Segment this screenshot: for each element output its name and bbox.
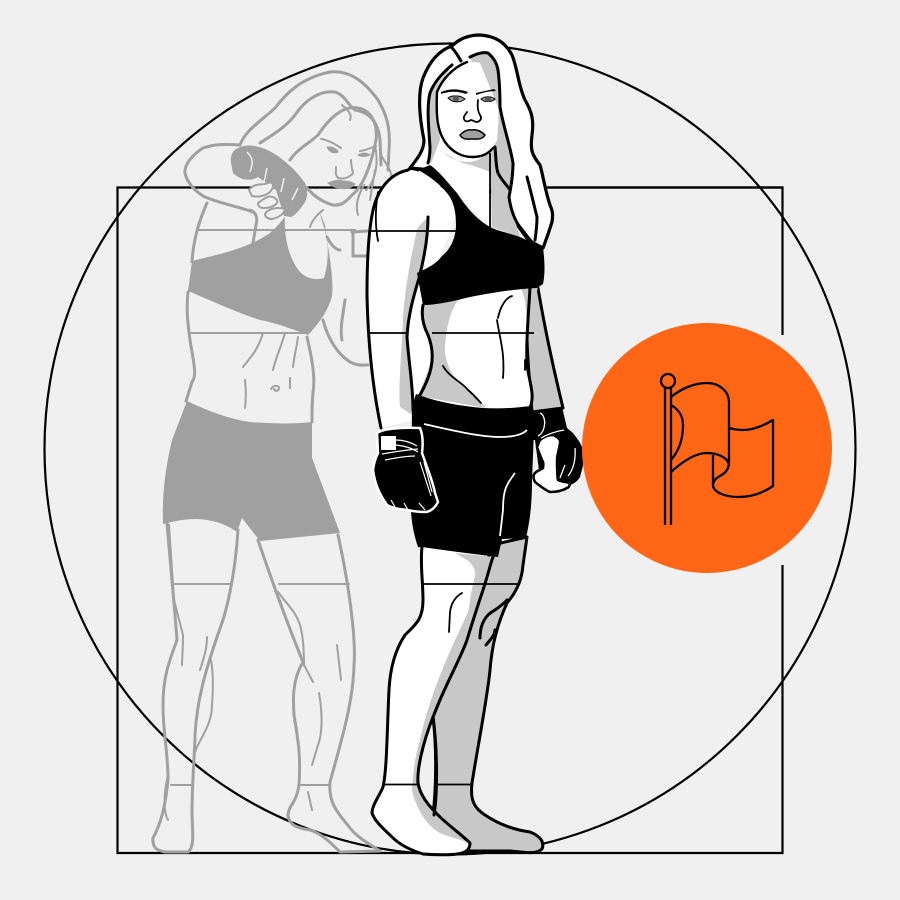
proportion square bbox=[118, 188, 782, 853]
fighter: far glove bbox=[532, 407, 584, 492]
fighter: neck and chest bbox=[430, 140, 490, 228]
icon: flag bbox=[661, 374, 773, 525]
fighter: facial features bbox=[441, 89, 496, 139]
fighter: front leg bbox=[372, 547, 517, 855]
ghost shorts bbox=[163, 401, 340, 541]
ghost bra bbox=[188, 213, 332, 335]
orange circle bbox=[582, 323, 832, 573]
fighter: bra bbox=[417, 165, 544, 305]
ghost figure: punching pose bbox=[153, 72, 392, 852]
ghost right arm and guard bbox=[323, 231, 368, 365]
fighter: torso bbox=[405, 285, 538, 412]
fighter: face bbox=[437, 62, 498, 157]
ghost legs bbox=[153, 523, 380, 852]
ghost torso bbox=[186, 203, 355, 422]
ghost head and hair bbox=[240, 72, 392, 215]
fighter: neck shadow bbox=[443, 152, 490, 172]
fighter: hair strands bbox=[428, 46, 537, 242]
ghost glove bbox=[231, 145, 307, 219]
ghost arm bbox=[185, 144, 257, 243]
ghost face bbox=[321, 139, 376, 189]
fighter: shorts bbox=[411, 394, 534, 557]
fighter: neck line and body guide lines bbox=[369, 153, 783, 333]
fighter: arm far side bbox=[526, 288, 563, 412]
fighter: back leg bbox=[433, 537, 543, 853]
fighter: near glove bbox=[373, 428, 438, 512]
fighter: hair shadows bbox=[428, 53, 520, 237]
fighter: near arm bbox=[367, 168, 458, 428]
fighter: hair mass bbox=[410, 35, 553, 248]
